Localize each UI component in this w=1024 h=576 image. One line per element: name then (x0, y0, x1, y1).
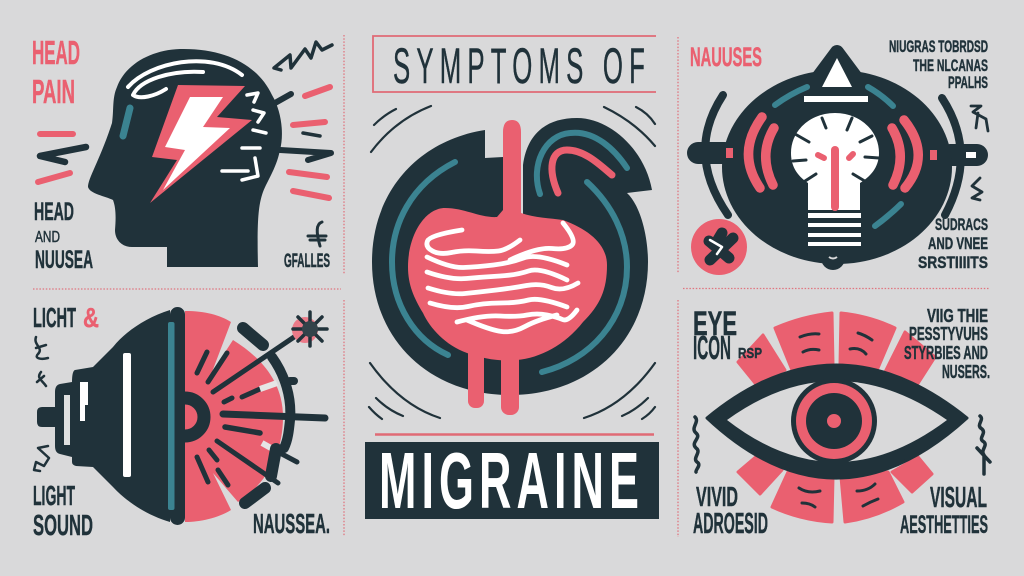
title: symptoms of (373, 36, 656, 94)
pain marks left (38, 134, 86, 182)
stomach folds (427, 223, 578, 332)
speaker outer arcs (243, 328, 294, 503)
small glyph and label: GFALLES (284, 251, 330, 272)
text block: eye top right: NUSERS. (942, 362, 990, 382)
text block: lower right: SUDRACS (935, 215, 988, 234)
title rule (375, 433, 654, 436)
text block: lower right: AND VNEE (928, 234, 988, 253)
text block: top right (889, 37, 988, 92)
icon: speaker body (37, 307, 185, 525)
squiggle marks (34, 337, 49, 471)
icon: head silhouette (88, 49, 282, 267)
icon: coral sound fan (185, 311, 283, 522)
coral arcs (748, 117, 918, 188)
heading: light and: LICHT (33, 302, 76, 333)
triangle marker (804, 58, 868, 102)
text block: lower right (918, 215, 988, 272)
panel: center stomach (365, 36, 659, 525)
heading: eye icon: RSP (738, 345, 762, 362)
panel: nausea lightbulb (690, 37, 988, 275)
text block: visual (900, 482, 988, 539)
coral squares (726, 148, 937, 160)
speaker half ring (185, 398, 204, 436)
squiggle marks (971, 106, 988, 200)
text block: head and nausea: AND (35, 229, 60, 246)
icon: eye (707, 365, 967, 478)
text block: eye top right: VIIG THIE (927, 306, 988, 326)
icon: lightning bolt (150, 85, 252, 203)
text block: light sound: LIGHT (33, 480, 75, 511)
text block: light sound (33, 480, 93, 542)
icon: spark burst (292, 312, 327, 346)
text block: lower right: SRSTIIIITS (918, 253, 988, 272)
heading: eye icon (693, 305, 762, 366)
squiggle marks (694, 416, 990, 474)
heading: head pain (32, 34, 80, 110)
icon: dark circle body (372, 118, 652, 395)
petal marks (799, 333, 878, 507)
text block: head and nausea (34, 198, 93, 274)
text block: vivid: VIVID (696, 481, 738, 512)
head details: white arcs and teal mark (123, 61, 266, 180)
heading: head pain: HEAD (32, 34, 80, 71)
title: migraine (365, 436, 659, 525)
icon: light bulb (791, 113, 879, 246)
panel: eye (693, 305, 990, 540)
icon: coral badge (691, 219, 747, 275)
side arcs and hubs (698, 95, 977, 215)
text block: light sound: SOUND (33, 510, 93, 542)
text block: top right: PPALHS (948, 73, 988, 92)
text block: head and nausea: NUUSEA (35, 246, 93, 274)
heading: nauuses: NAUUSES (690, 42, 762, 72)
teal and coral arcs (392, 133, 627, 372)
text block: head and nausea: HEAD (34, 198, 74, 226)
text block: nausea: NAUSSEA. (253, 508, 330, 539)
panel: eye: ADROESID (693, 508, 768, 540)
motion arcs (369, 106, 655, 419)
text block: vivid (693, 481, 768, 540)
icon: dial body (722, 52, 976, 270)
heading: eye icon: ICON (693, 329, 731, 366)
title: symptoms of: SYMPTOMS OF (393, 38, 651, 94)
sound rays (197, 333, 325, 485)
icon: stomach (408, 120, 607, 415)
heading: eye icon: EYE (693, 305, 737, 343)
small glyph and label (284, 222, 330, 272)
panel: light and sound (33, 302, 330, 542)
panel: head pain (32, 34, 332, 274)
text block: eye top right (904, 306, 990, 382)
heading: head pain: PAIN (32, 73, 75, 110)
icon: coral petals (738, 313, 935, 522)
heading: light and: & (83, 302, 99, 333)
teal arcs (775, 87, 901, 226)
title: migraine: MIGRAINE (379, 436, 644, 525)
pain marks right (274, 42, 332, 198)
